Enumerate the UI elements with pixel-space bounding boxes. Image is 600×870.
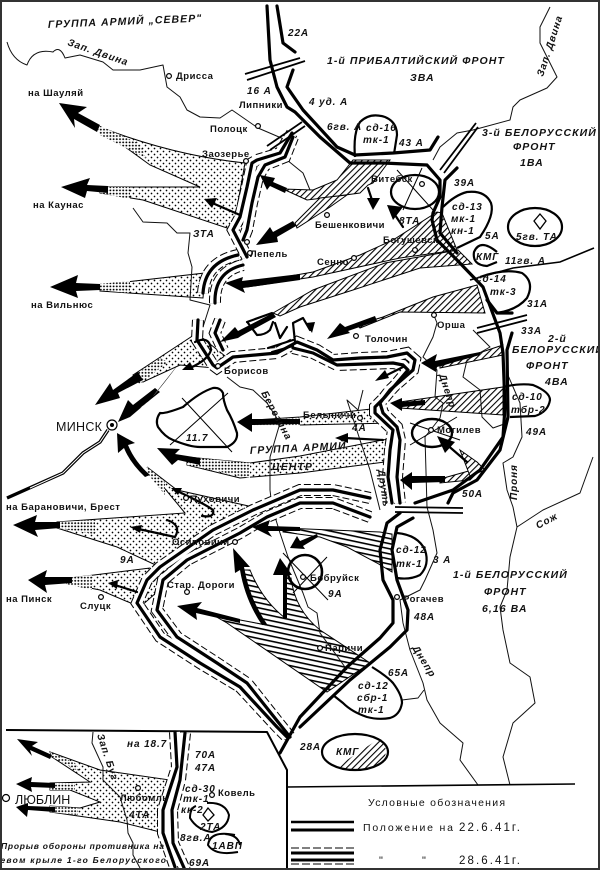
arrow: Berezina central — [237, 413, 300, 432]
map labels: army groups and directions: Березина — [258, 389, 294, 442]
map labels: army groups and directions: 28А — [299, 742, 321, 753]
map labels: army groups and directions: Осиповичи — [172, 537, 230, 548]
arrow: Slutsk internal — [108, 580, 137, 592]
map labels: army groups and directions: мк-1 — [451, 214, 476, 225]
map labels: army groups and directions: 4 уд. А — [308, 97, 348, 108]
map labels: army groups and directions: сд-12 — [396, 545, 427, 556]
dotted breakthrough: Army Group Centre wedge — [187, 438, 400, 478]
map labels: army groups and directions: ГРУППА АРМИЙ „СЕВЕР" — [48, 12, 203, 31]
road to Minsk — [7, 430, 108, 498]
inset panel: Lublin-Kovel breakthrough — [0, 728, 287, 870]
blob: sd-10 tbr-2 — [503, 384, 550, 417]
hatched breakthrough: Bobruisk south wedge with prongs — [213, 570, 370, 692]
map labels: army groups and directions: ЦЕНТР — [272, 461, 313, 473]
arrow: to Minsk from Borisov lower — [118, 362, 180, 422]
map labels: army groups and directions: Пуховичи — [190, 494, 240, 505]
hatched breakthrough: Mogilev wedges — [400, 345, 503, 483]
dotted breakthrough: Baranovichi and Minsk south wedges — [57, 467, 253, 567]
dotted breakthrough: Pinsk wedge — [66, 568, 165, 607]
map labels: army groups and directions: сд-12 — [358, 681, 389, 692]
arrow: to Star. Dorogi — [177, 602, 240, 623]
map labels: army groups and directions: 16 А — [247, 86, 272, 97]
inset labels: 47А — [194, 763, 216, 774]
arrow: to Pinsk — [28, 570, 72, 593]
map labels: army groups and directions: ЗВА — [410, 72, 435, 84]
map labels: army groups and directions: КМГ — [336, 747, 359, 758]
inset labels: тк-1 — [183, 794, 209, 805]
city markers — [99, 74, 436, 650]
map labels: army groups and directions: Днепр — [436, 372, 458, 410]
inset labels: кк-2 — [181, 805, 204, 816]
map labels: army groups and directions: ФРОНТ — [513, 141, 556, 153]
arrow: to Kaunas — [61, 178, 108, 198]
inset labels: на 18.7 — [127, 739, 167, 750]
encirclement: Vitebsk — [391, 168, 439, 210]
legend: Положение на — [363, 822, 453, 834]
map labels: army groups and directions: тк-3 — [490, 287, 516, 298]
arrow: thin arrow in centre pocket — [335, 433, 383, 443]
inset labels: 2ТА — [199, 822, 221, 833]
inset armies — [2, 786, 240, 853]
arrow: to Bobruisk north-east — [290, 534, 318, 549]
map labels: army groups and directions: 39А — [454, 178, 475, 189]
arrow: to Osipovichi from south — [233, 548, 267, 625]
map labels: army groups and directions: 43 А — [398, 138, 424, 149]
railway line at Dnepr — [470, 248, 594, 280]
map labels: army groups and directions: Сенно — [317, 257, 349, 268]
map labels: army groups and directions: 2-й — [547, 333, 567, 345]
map labels: army groups and directions: тк-1 — [396, 559, 422, 570]
arc: KMG — [474, 245, 497, 266]
encirclement: Mogilev — [410, 417, 460, 447]
inset labels: ЛЮБЛИН — [15, 793, 70, 807]
map labels: army groups and directions: 65А — [388, 668, 409, 679]
arrow: centre wedge head — [157, 448, 200, 465]
map labels: army groups and directions: Днепр — [409, 643, 438, 680]
map labels: army groups and directions: Сож — [534, 511, 560, 532]
map labels: army groups and directions: Витебск — [371, 174, 413, 185]
map labels: army groups and directions: 4ВА — [544, 376, 569, 388]
ellipse: 5 gv TA — [508, 208, 562, 246]
inset dotted wedge — [50, 752, 172, 835]
map labels: army groups and directions: 22А — [287, 28, 309, 39]
dotted breakthrough: Borisov to Minsk wedges — [130, 333, 230, 384]
map labels: army groups and directions: 31А — [527, 299, 548, 310]
arrow: down to Vitebsk west — [367, 188, 380, 210]
map labels: army groups and directions: 9А — [328, 589, 343, 600]
map labels: army groups and directions: 11гв. А — [505, 256, 546, 267]
map labels: army groups and directions: Рогачев — [403, 594, 444, 605]
legend: " — [379, 855, 383, 867]
arrow: to Zaozerye from east — [260, 175, 287, 193]
map labels: army groups and directions: ГРУППА АРМИЙ — [249, 439, 347, 457]
arrow: to Osipovichi — [252, 520, 300, 537]
legend: " — [422, 855, 426, 867]
map labels: army groups and directions: сд-10 — [512, 392, 543, 403]
map labels: army groups and directions: МИНСК — [56, 420, 103, 434]
map labels: army groups and directions: 6,16 ВА — [482, 603, 527, 615]
dotted breakthrough: centre wedge at Berezina — [250, 408, 393, 426]
arrow: up to Vitebsk south — [387, 205, 403, 227]
map labels: army groups and directions: Бешенковичи — [315, 220, 385, 231]
arrow: Mogilev from south-east — [437, 436, 467, 462]
map labels: army groups and directions: Друть — [375, 468, 391, 508]
arrow: to Minsk from south — [117, 433, 150, 477]
map labels: army groups and directions: на Барановичи, Брест — [6, 502, 120, 513]
map labels: army groups and directions: 3-й БЕЛОРУССКИЙ — [482, 126, 597, 139]
arrow: south of Mogilev — [400, 472, 445, 490]
inset labels: Ковель — [218, 788, 255, 799]
map labels: army groups and directions: 8ТА — [399, 216, 420, 227]
legend sample: 22.6.41 — [291, 822, 354, 830]
map labels: army groups and directions: Дрисса — [176, 71, 214, 82]
hatched breakthrough: Orsha wedges — [273, 250, 485, 328]
inset arrows — [16, 739, 55, 817]
map labels: army groups and directions: Борисов — [224, 366, 269, 377]
blob: sd-12 tk-1 right — [397, 533, 427, 579]
map labels: army groups and directions: тбр-2 — [511, 404, 546, 416]
ellipse: KMG half hatched — [322, 734, 388, 770]
front boundary bars — [245, 58, 527, 513]
arrow: Senno to west — [225, 274, 300, 293]
map labels: army groups and directions: 6гв. А — [327, 122, 362, 133]
inset river — [92, 732, 140, 868]
map labels: army groups and directions: Полоцк — [210, 124, 248, 135]
arrow: to Baranovichi — [13, 515, 60, 537]
legend — [287, 784, 575, 867]
map labels: army groups and directions: Слуцк — [80, 601, 111, 612]
map labels: army groups and directions: Лепель — [250, 249, 288, 260]
map labels: army groups and directions: 11.7 — [186, 433, 208, 444]
map labels: army groups and directions: 1-й БЕЛОРУССКИЙ — [453, 568, 568, 581]
map labels: army groups and directions: Зап. Двина — [535, 14, 566, 78]
map labels: army groups and directions: сбр-1 — [357, 692, 388, 704]
map labels: army groups and directions: сд-13 — [452, 202, 483, 213]
map labels: army groups and directions: КМГ — [476, 252, 499, 263]
city marker: Minsk — [107, 420, 117, 430]
inset labels: Прорыв обороны противника на — [1, 841, 164, 851]
dotted breakthrough: Vilnius wedge — [98, 273, 205, 298]
blob: sd-13 mk-1 kn-1 — [443, 192, 492, 248]
hatched breakthrough: Senno wedge — [245, 212, 457, 287]
map labels: army groups and directions: на Вильнюс — [31, 300, 93, 311]
map labels: army groups and directions: сд-14 — [476, 274, 507, 285]
inset labels: Любомль — [120, 793, 169, 804]
legend: 22.6.41г. — [459, 822, 520, 834]
map labels: army groups and directions: 3 А — [433, 555, 451, 566]
map labels: army groups and directions: на Пинск — [6, 594, 52, 605]
arrow: Mogilev wedge west — [390, 398, 425, 411]
inset labels: 8гв.А — [180, 833, 211, 844]
map labels: army groups and directions: Могилев — [437, 425, 481, 436]
map labels: army groups and directions: Орша — [437, 320, 466, 331]
map labels: army groups and directions: 5гв. ТА — [516, 232, 558, 243]
front line 22.6.41 north and east — [267, 6, 512, 753]
arrow: Bobruisk prong — [273, 558, 292, 618]
blob: sd-16 tk-1 — [355, 115, 397, 157]
legend sample: 28.6.41 — [291, 848, 354, 864]
map labels: army groups and directions: 5А — [485, 231, 500, 242]
map labels: army groups and directions: Стар. Дороги — [167, 580, 235, 591]
arc: sd-14 tk-3 — [480, 271, 530, 313]
map labels: army groups and directions: Заозерье — [202, 149, 250, 160]
inset labels: Зап. Буг — [94, 733, 120, 782]
legend: Условные обозначения — [368, 797, 505, 809]
map labels: army groups and directions: 9А — [120, 555, 135, 566]
map labels: army groups and directions: 50А — [462, 489, 483, 500]
legend: 28.6.41г. — [459, 855, 520, 867]
dotted breakthrough: Shaulyai and Kaunas wedges — [95, 124, 245, 230]
arrow: Osipovichi hook — [130, 520, 177, 537]
map labels: army groups and directions: на Каунас — [33, 200, 84, 211]
arrow: thin arrow at Druть — [375, 367, 403, 381]
map labels: army groups and directions: кн-1 — [451, 226, 475, 237]
map labels: army groups and directions: Белыничи — [303, 410, 356, 421]
inset labels: 1АВП — [212, 841, 243, 852]
arrow: Pukhovichi hook — [171, 488, 213, 516]
map labels: army groups and directions: Бобруйск — [310, 573, 359, 584]
map labels: army groups and directions: ФРОНТ — [526, 360, 569, 372]
inset labels: 4ТА — [128, 810, 150, 821]
encirclement: 11.7 Minsk pocket — [157, 388, 237, 452]
arrow: to Shaulyai — [59, 103, 100, 132]
inset labels: 69А — [189, 858, 210, 869]
arrow: internal Zaozerye — [204, 198, 240, 215]
arrow: to Borisov from Orsha direction — [220, 313, 276, 342]
map labels: army groups and directions: Проня — [509, 464, 520, 500]
map labels: army groups and directions: 1ВА — [520, 157, 544, 169]
arrow: hooks near Tolochin — [247, 313, 315, 352]
arrow: Borisov internal hook — [182, 340, 211, 370]
blob: sd-12 sbr-1 tk-1 — [333, 667, 402, 719]
map labels: army groups and directions: Толочин — [365, 334, 408, 345]
map labels: army groups and directions: Липники — [239, 100, 283, 111]
map labels: army groups and directions: 4А — [351, 423, 367, 434]
arrow: to Tolochin — [327, 316, 377, 339]
arrow: to Minsk from Borisov upper — [95, 372, 143, 405]
front line 28.6.41 — [137, 133, 415, 737]
hatched breakthrough: Bobruisk north wedge — [283, 528, 392, 572]
encirclement: Bobruisk — [283, 553, 328, 600]
map labels: army groups and directions: 49А — [525, 427, 547, 438]
map labels: army groups and directions: ЗТА — [193, 229, 215, 240]
map labels: army groups and directions: ФРОНТ — [484, 586, 527, 598]
map labels: army groups and directions: тк-1 — [363, 135, 389, 146]
inset labels — [0, 733, 255, 869]
inset front lines — [163, 732, 185, 870]
map labels: army groups and directions: сд-16 — [366, 123, 397, 134]
map labels: army groups and directions: Паричи — [325, 643, 363, 654]
map labels: army groups and directions: Зап. Двина — [66, 37, 130, 69]
map labels: army groups and directions: 48А — [413, 612, 435, 623]
inset labels: сд-30 — [185, 784, 216, 795]
map labels: army groups and directions: 1-й ПРИБАЛТИЙСКИЙ ФРОНТ — [327, 54, 505, 67]
map labels: army groups and directions: 33А — [521, 326, 542, 337]
inset labels: 70А — [195, 750, 216, 761]
map labels: army groups and directions: тк-1 — [358, 705, 384, 716]
map labels: army groups and directions: Богушевск — [383, 235, 438, 246]
arrow: Dnepr crossing — [421, 352, 480, 372]
hatched breakthrough: Vitebsk north wedges — [283, 160, 390, 228]
map labels: army groups and directions: на Шауляй — [28, 88, 84, 99]
arrow: to Lepel from east — [256, 221, 296, 245]
arrow: to Vilnius — [50, 275, 100, 298]
